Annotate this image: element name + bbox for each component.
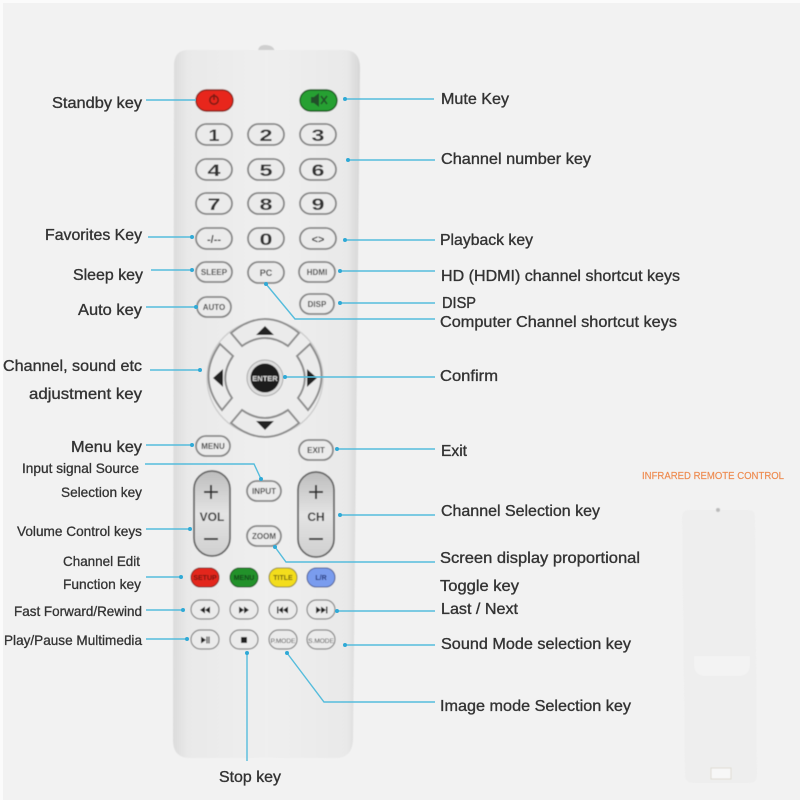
menu, exit, input and zoom keys (196, 436, 333, 546)
remote body (173, 50, 360, 758)
number keys: 4 (208, 161, 221, 180)
label: Play/Pause Multimedia: Play/Pause Multimedia (4, 632, 142, 648)
coloured keys: TITLE (273, 575, 293, 582)
label: Sleep key (73, 267, 194, 284)
label: Sound Mode selection key: Sound Mode selection key (441, 636, 631, 653)
number keys: 5 (260, 161, 272, 180)
label: Channel, sound etc adjustment key: Channel, sound etc (3, 358, 142, 375)
label: Auto key: Auto key (78, 302, 142, 319)
mute key (300, 90, 337, 111)
label: Volume Control keys: Volume Control keys (17, 523, 142, 539)
label: Menu key (71, 439, 194, 456)
label: Sleep key: Sleep key (73, 267, 143, 284)
label: Auto key (78, 302, 198, 319)
label: Exit: Exit (441, 443, 468, 460)
function keys: HDMI (307, 268, 327, 277)
number keys (196, 124, 336, 249)
label: DISP: DISP (442, 295, 476, 312)
label: HD (HDMI) channel shortcut keys: HD (HDMI) channel shortcut keys (441, 268, 680, 285)
remote control back view (682, 508, 757, 783)
label: Input signal Source Selection key: Input signal Source (22, 460, 139, 476)
coloured keys: SETUP (193, 575, 217, 582)
function keys: DISP (308, 300, 327, 309)
channel rocker: CH (307, 510, 325, 524)
label: HD (HDMI) channel shortcut keys (338, 268, 680, 285)
direction pad (207, 319, 323, 437)
menu, exit, input and zoom keys: MENU (201, 442, 225, 451)
battery cover latch (694, 656, 750, 676)
label: Sound Mode selection key (343, 636, 631, 653)
label: Screen display proportional: Screen display proportional (440, 550, 640, 567)
label: Confirm (283, 368, 498, 385)
label: Mute Key (343, 91, 509, 108)
label: Channel Edit Function key (63, 553, 183, 592)
label: Exit (335, 443, 468, 460)
media transport keys (191, 600, 335, 649)
power key (196, 90, 233, 111)
bottom clip (711, 768, 731, 779)
label: Computer Channel shortcut keys: Computer Channel shortcut keys (440, 314, 677, 331)
label: Confirm: Confirm (440, 368, 498, 385)
function keys (196, 262, 335, 317)
number keys: 2 (260, 126, 272, 145)
label: Channel number key: Channel number key (441, 151, 591, 168)
heading: infrared remote control: INFRARED REMOTE CONTROL (642, 471, 784, 482)
label: Input signal Source Selection key: Selection key (61, 484, 142, 500)
volume rocker (194, 471, 230, 556)
number keys: 3 (312, 126, 324, 145)
label: Computer Channel shortcut keys (264, 282, 677, 331)
label: Menu key: Menu key (71, 439, 142, 456)
label: DISP (338, 295, 476, 312)
label: Playback key (343, 232, 533, 249)
label: Channel Edit Function key: Function key (63, 576, 141, 592)
label: Favorites Key: Favorites Key (45, 227, 142, 244)
label: Stop key: Stop key (219, 769, 281, 786)
number keys: 0 (260, 230, 272, 249)
label: Channel number key (346, 151, 591, 168)
number keys: 1 (208, 126, 220, 145)
label: Last / Next: Last / Next (441, 601, 519, 618)
label: Channel, sound etc adjustment key (3, 358, 202, 403)
menu, exit, input and zoom keys: INPUT (252, 487, 276, 496)
number keys: <> (312, 234, 324, 246)
label: Image mode Selection key (285, 651, 631, 715)
media transport keys: S.MODE (308, 638, 334, 645)
label: Channel Selection key (338, 503, 600, 520)
number keys: 6 (312, 161, 324, 180)
volume rocker: VOL (200, 510, 224, 524)
coloured keys: L/R (315, 575, 327, 582)
label: Toggle key: Toggle key (440, 578, 519, 595)
label: Screen display proportional (273, 545, 640, 567)
top nub (716, 508, 720, 512)
label: Channel Edit Function key: Channel Edit (63, 553, 140, 569)
label: Fast Forward/Rewind: Fast Forward/Rewind (14, 603, 142, 619)
number keys: 7 (208, 195, 220, 214)
remote control front view (173, 45, 360, 758)
function keys: PC (260, 268, 273, 278)
coloured keys (191, 568, 335, 587)
media transport keys: P.MODE (271, 638, 296, 645)
direction pad: ENTER (252, 374, 278, 383)
menu, exit, input and zoom keys: ZOOM (252, 532, 276, 541)
IR emitter nub (258, 45, 275, 52)
coloured keys: MENU (234, 575, 254, 582)
label: Channel, sound etc adjustment key: adjustment key (29, 386, 142, 403)
label: Image mode Selection key: Image mode Selection key (440, 698, 631, 715)
function keys: SLEEP (201, 268, 228, 277)
channel rocker (298, 472, 334, 557)
label: Stop key (219, 651, 281, 786)
label: Input signal Source Selection key (22, 460, 263, 500)
function keys: AUTO (203, 303, 225, 312)
label: Playback key: Playback key (440, 232, 533, 249)
number keys: 9 (312, 195, 324, 214)
menu, exit, input and zoom keys: EXIT (307, 446, 325, 455)
label: Favorites Key (45, 227, 194, 244)
label: Standby key: Standby key (52, 95, 142, 112)
label: Mute Key: Mute Key (441, 91, 509, 108)
number keys: 8 (260, 195, 272, 214)
label: Channel Selection key: Channel Selection key (441, 503, 600, 520)
number keys: -/-- (207, 234, 221, 246)
label: Last / Next (335, 601, 519, 618)
